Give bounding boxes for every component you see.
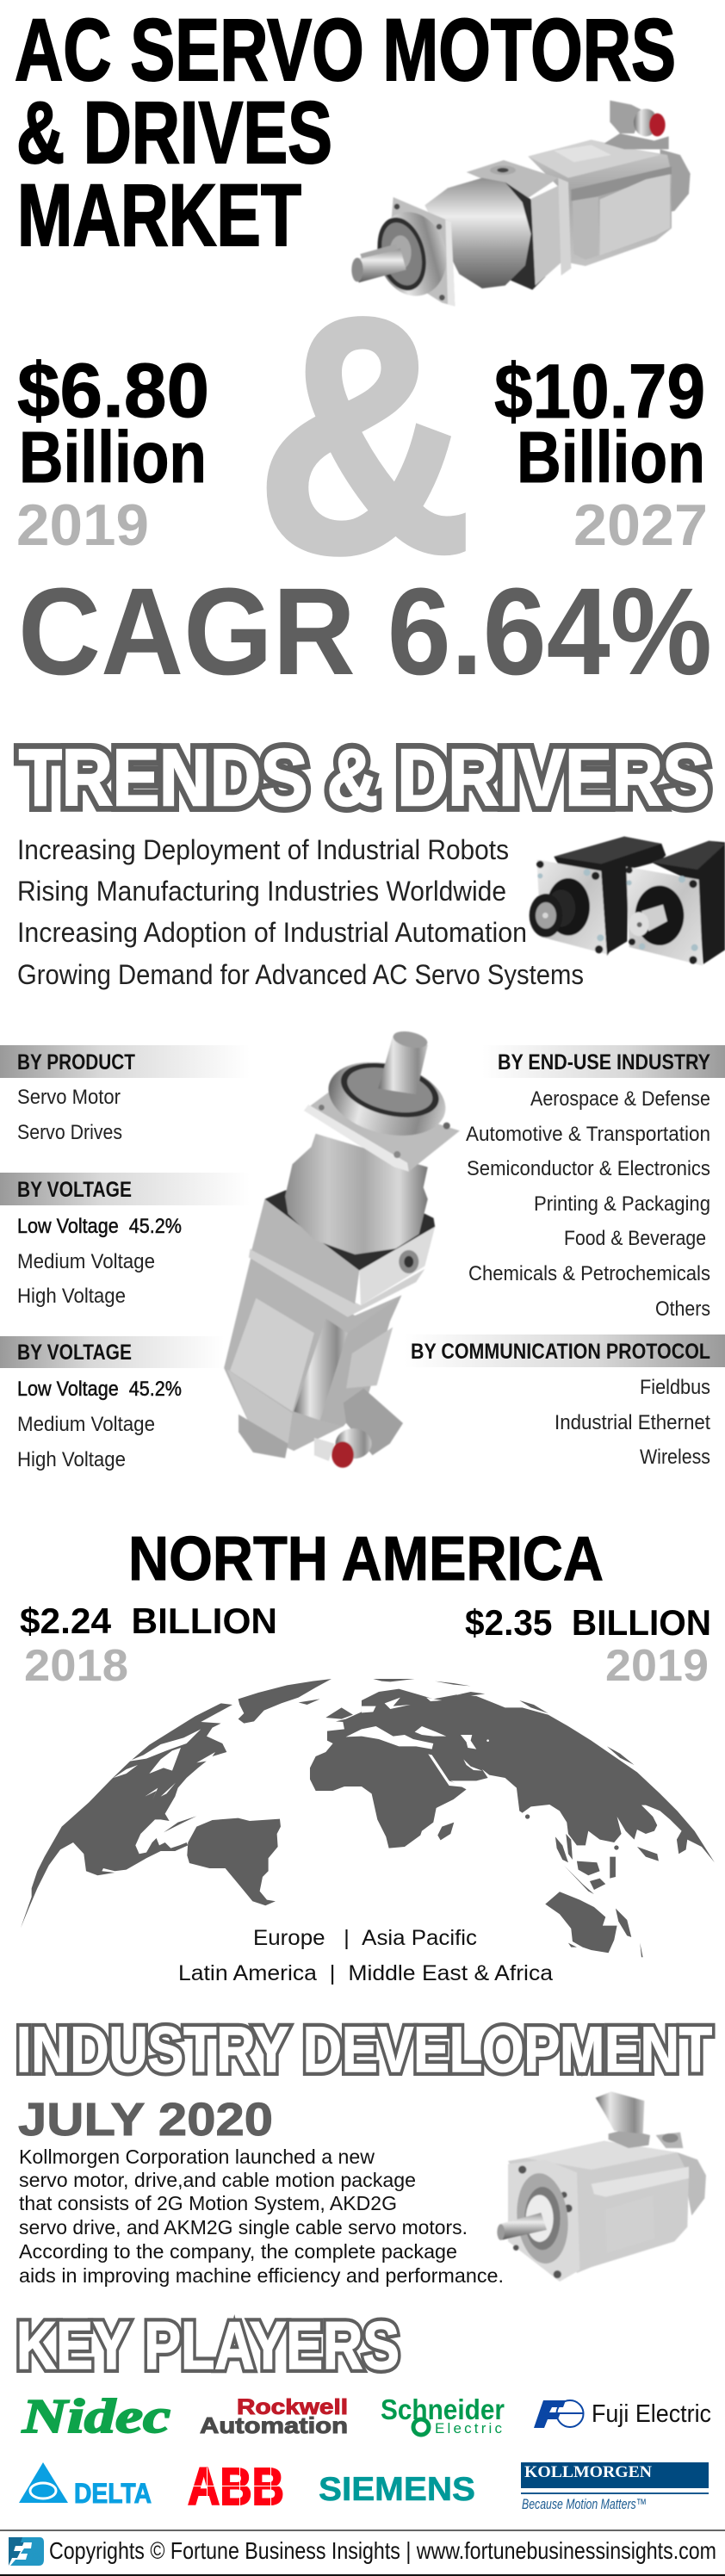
panel: by product [0, 1045, 250, 1144]
panel: by communication protocol: Industrial Ethernet [555, 1411, 710, 1434]
logo: schneider electric: Electric [435, 2420, 503, 2437]
list: other regions [178, 1926, 553, 1985]
panel: by voltage repeat: Medium Voltage [17, 1413, 155, 1436]
text block: development: Kollmorgen Corporation launched a new [19, 2146, 375, 2168]
stat: 2027 market size [494, 348, 708, 558]
panel: by end-use industry: Others [655, 1297, 710, 1321]
panel: by product: Servo Motor [17, 1086, 121, 1109]
icon: fortune business insights logo [9, 2537, 44, 2566]
stat: 2019 market size: 2019 [16, 492, 149, 558]
logo: fuji electric [534, 2400, 711, 2428]
list: trends and drivers [17, 834, 584, 990]
text block: development: servo drive, and AKM2G single cable servo motors. [19, 2216, 468, 2239]
stat: 2027 market size: $10.79 [494, 348, 705, 434]
logo: kollmorgen [521, 2462, 709, 2512]
logo: kollmorgen: KOLLMORGEN [524, 2463, 652, 2481]
panel: by end-use industry: Semiconductor & Electronics [467, 1157, 710, 1180]
text block: development: aids in improving machine efficiency and performance. [19, 2264, 504, 2287]
logo: delta [19, 2462, 152, 2509]
text block: development: servo motor, drive,and cable motion package [19, 2169, 416, 2191]
stat: 2019 market size: Billion [19, 417, 207, 498]
panel: by end-use industry: Food & Beverage [564, 1227, 706, 1250]
panel: by communication protocol: Fieldbus [640, 1376, 710, 1399]
panel: by voltage [0, 1173, 250, 1308]
logo: nidec: Nidec [22, 2390, 170, 2443]
list: trends and drivers: Increasing Adoption of Industrial Automation [17, 917, 527, 948]
ampersand: & [256, 247, 473, 622]
stat: 2019 market size: $6.80 [17, 347, 209, 433]
panel: by product: Servo Drives [17, 1121, 122, 1144]
title: MARKET [17, 166, 301, 264]
panel: by voltage repeat: High Voltage [17, 1448, 126, 1471]
stat: north america 2019: $2.35 BILLION [465, 1602, 711, 1643]
world map [21, 1679, 715, 1957]
footer [0, 2530, 725, 2576]
list: other regions: Latin America | Middle East & Africa [178, 1961, 553, 1985]
logo: siemens: SIEMENS [319, 2471, 475, 2508]
image: twin stepper motors [530, 837, 725, 966]
list: trends and drivers: Increasing Deployment of Industrial Robots [17, 834, 509, 865]
stat: 2027 market size: 2027 [573, 492, 708, 558]
heading: north america: NORTH AMERICA [128, 1525, 604, 1594]
logo: schneider electric: Schneider [381, 2393, 505, 2425]
stat: north america 2019: 2019 [605, 1641, 709, 1691]
panel: by end-use industry: Printing & Packaging [534, 1192, 710, 1216]
heading: key players: KEY PLAYERS [16, 2307, 400, 2383]
logo: schneider electric [381, 2393, 505, 2437]
image: kollmorgen servo motor [497, 2091, 706, 2282]
list: other regions: Europe | Asia Pacific [253, 1926, 477, 1950]
panel: by voltage: Low Voltage 45.2% [17, 1215, 182, 1238]
stat: north america 2018: $2.24 BILLION [20, 1601, 277, 1641]
list: trends and drivers: Growing Demand for Advanced AC Servo Systems [17, 959, 584, 990]
panel: by voltage: High Voltage [17, 1285, 126, 1308]
image: rotated servo motor [224, 1029, 460, 1468]
panel: by end-use industry [466, 1045, 725, 1321]
stat: 2019 market size [16, 347, 209, 558]
heading: key players: KEY PLAYERS [16, 2307, 400, 2383]
text block: development: According to the company, the complete package [19, 2240, 457, 2263]
panel: by communication protocol: Wireless [640, 1446, 710, 1469]
stat: north america 2018: 2018 [24, 1641, 128, 1691]
logo: fuji electric: Fuji Electric [592, 2400, 711, 2428]
title [15, 1, 676, 264]
panel: by voltage: Medium Voltage [17, 1250, 155, 1273]
stat: north america 2019 [465, 1602, 711, 1691]
logo: delta: DELTA [74, 2478, 152, 2509]
panel: by end-use industry: Automotive & Transportation [466, 1123, 710, 1146]
stat: north america 2018 [20, 1601, 277, 1691]
panel: by voltage: BY VOLTAGE [17, 1178, 132, 1202]
date: july 2020: JULY 2020 [18, 2094, 273, 2146]
logo: rockwell automation: Automation [200, 2412, 348, 2438]
panel: by end-use industry: Chemicals & Petrochemicals [468, 1262, 710, 1285]
panel: by voltage repeat: BY VOLTAGE [17, 1341, 132, 1365]
text block: development [19, 2146, 504, 2287]
panel: by communication protocol [405, 1334, 725, 1469]
logo: kollmorgen: Because Motion Matters™ [522, 2496, 647, 2512]
logo: rockwell automation [200, 2395, 348, 2438]
text block: development: that consists of 2G Motion System, AKD2G [19, 2192, 397, 2214]
title: & DRIVES [16, 84, 332, 182]
logo: rockwell automation: Rockwell [237, 2395, 348, 2419]
logo: abb: ABB [188, 2457, 284, 2516]
list: trends and drivers: Rising Manufacturing Industries Worldwide [17, 876, 506, 907]
panel: by product: BY PRODUCT [17, 1050, 135, 1074]
image: planetary gear servo motor [351, 101, 691, 307]
panel: by voltage repeat: Low Voltage 45.2% [17, 1378, 182, 1401]
panel: by voltage repeat [0, 1336, 224, 1471]
